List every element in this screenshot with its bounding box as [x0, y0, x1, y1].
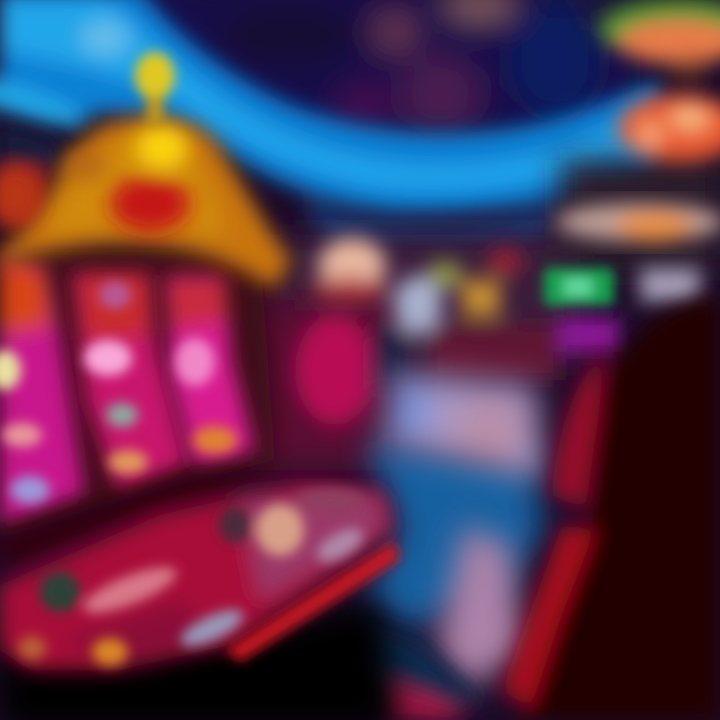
- table shadow: [0, 600, 400, 720]
- reel left: [0, 255, 85, 525]
- mid background: dark wall: [250, 160, 720, 470]
- lamp: green and orange top: [600, 0, 720, 93]
- reel right: [165, 275, 255, 470]
- ceiling: dark panel with lights: [120, 0, 720, 140]
- floor: lavender: [385, 372, 545, 480]
- floor: [365, 440, 545, 630]
- reel middle: [72, 272, 188, 492]
- slot cabinet: [0, 250, 275, 540]
- table surface: [0, 470, 395, 670]
- table: [0, 470, 400, 720]
- lamp: white and orange lower: [555, 203, 720, 242]
- blue wave band: [0, 0, 660, 250]
- golden dome: [0, 52, 292, 290]
- table edge: [225, 540, 400, 662]
- table details: [18, 488, 369, 666]
- left dark strip: [0, 122, 70, 225]
- slot machines: [0, 250, 275, 540]
- right lamps: [555, 0, 720, 242]
- lamp: orange middle: [618, 94, 720, 162]
- green sign: [544, 268, 614, 306]
- right chair: [502, 295, 720, 720]
- floor: blue: [365, 440, 545, 630]
- distant machines: [295, 238, 700, 425]
- floor: pink: [435, 525, 525, 690]
